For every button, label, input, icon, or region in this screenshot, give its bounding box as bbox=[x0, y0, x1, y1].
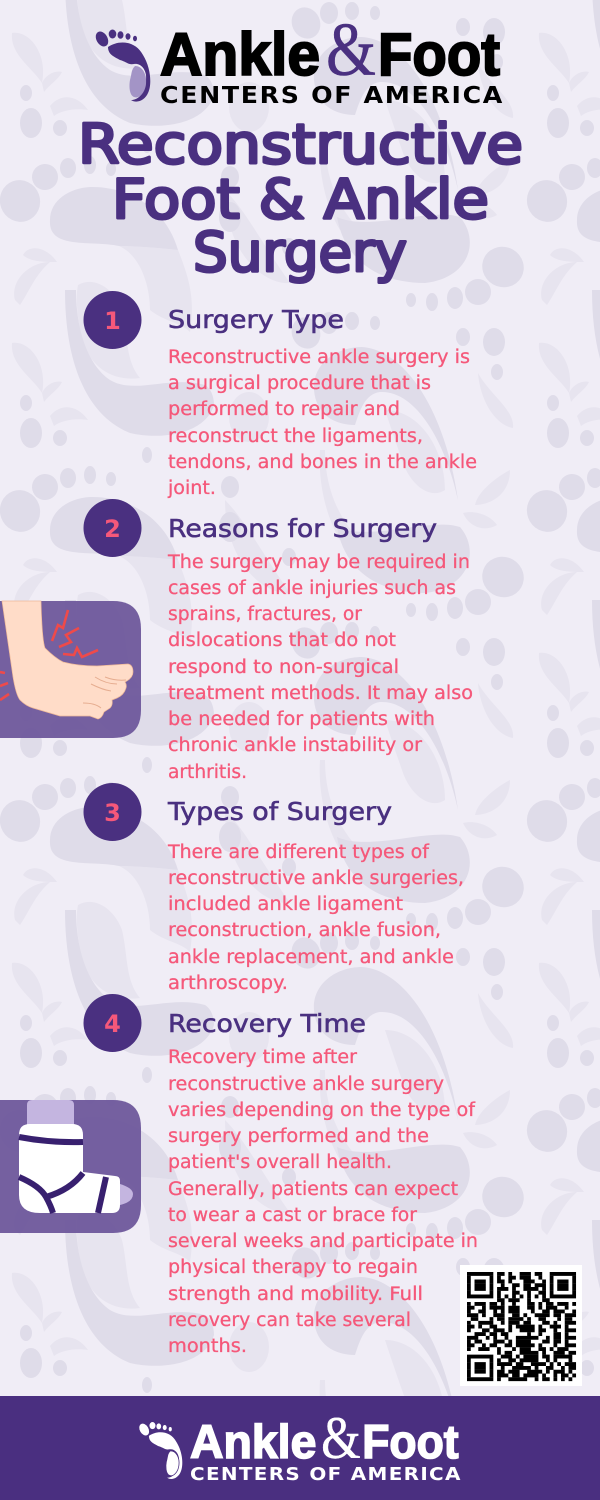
title: Reconstructive bbox=[78, 113, 523, 176]
number badge 1: 1 bbox=[104, 307, 121, 335]
icon: foot in cast bbox=[19, 1100, 133, 1213]
footer wordmark bbox=[190, 1405, 462, 1485]
text: types of surgery bbox=[167, 842, 464, 994]
panel: reasons for surgery bbox=[84, 499, 473, 783]
title: Foot & Ankle bbox=[112, 168, 489, 231]
heading: reasons for surgery: Reasons for Surgery bbox=[168, 514, 437, 543]
icon: white footprint bbox=[137, 1422, 182, 1479]
panel: types of surgery bbox=[84, 783, 464, 994]
text: recovery time: recovery can take several bbox=[168, 1310, 411, 1331]
text: recovery time: strength and mobility. Full bbox=[168, 1284, 423, 1305]
illustration: foot cast card bbox=[0, 1100, 141, 1233]
logo wordmark: & bbox=[326, 8, 376, 92]
icon: purple footprint bbox=[93, 29, 150, 102]
toe lines bbox=[83, 677, 126, 708]
text: reasons for surgery: cases of ankle injuries such as bbox=[168, 578, 456, 599]
text: reasons for surgery: respond to non-surgical bbox=[168, 657, 399, 678]
panel: surgery type bbox=[84, 291, 477, 499]
text: types of surgery: reconstruction, ankle fusion, bbox=[168, 920, 441, 941]
text: reasons for surgery: chronic ankle instability or bbox=[168, 735, 422, 756]
text: surgery type: reconstruct the ligaments, bbox=[168, 426, 423, 447]
text: reasons for surgery: sprains, fractures, or bbox=[168, 604, 362, 625]
text: recovery time: reconstructive ankle surgery bbox=[168, 1074, 444, 1095]
logo wordmark bbox=[160, 8, 504, 109]
text: reasons for surgery: treatment methods. It may also bbox=[168, 683, 473, 704]
text: types of surgery: arthroscopy. bbox=[168, 973, 288, 994]
text: surgery type: tendons, and bones in the ankle bbox=[168, 452, 477, 473]
footer wordmark: Foot bbox=[362, 1416, 459, 1469]
title: Surgery bbox=[193, 221, 407, 284]
text: reasons for surgery: The surgery may be required in bbox=[167, 552, 470, 573]
number badge 4 bbox=[84, 994, 142, 1052]
footer logo bbox=[137, 1405, 462, 1485]
number badge 3 bbox=[84, 783, 142, 841]
text: surgery type bbox=[167, 347, 477, 499]
number badge 4: 4 bbox=[104, 1010, 121, 1038]
text: types of surgery: ankle replacement, and ankle bbox=[168, 947, 454, 968]
logo wordmark: CENTERS OF AMERICA bbox=[160, 83, 504, 109]
text: surgery type: joint. bbox=[167, 478, 216, 499]
logo wordmark: Ankle bbox=[160, 21, 320, 88]
footer wordmark: CENTERS OF AMERICA bbox=[190, 1464, 462, 1485]
title bbox=[78, 113, 523, 284]
number badge 2 bbox=[84, 499, 142, 557]
heading: recovery time: Recovery Time bbox=[168, 1009, 366, 1038]
QR code bbox=[460, 1265, 582, 1386]
number badge 3: 3 bbox=[104, 799, 121, 827]
text: recovery time: varies depending on the type of bbox=[168, 1100, 476, 1121]
text: recovery time: months. bbox=[168, 1336, 247, 1357]
text: reasons for surgery: dislocations that do not bbox=[168, 630, 396, 651]
text: types of surgery: There are different types of bbox=[167, 842, 430, 863]
number badge 1 bbox=[84, 291, 142, 349]
footer wordmark: Ankle bbox=[190, 1416, 316, 1469]
text: recovery time: patient's overall health. bbox=[168, 1152, 392, 1173]
text: recovery time: several weeks and participate in bbox=[168, 1231, 478, 1252]
panel: recovery time bbox=[84, 994, 478, 1357]
text: recovery time: Recovery time after bbox=[168, 1047, 357, 1068]
text: surgery type: Reconstructive ankle surgery is bbox=[168, 347, 470, 368]
text: recovery time: to wear a cast or brace for bbox=[168, 1205, 417, 1226]
heading: surgery type: Surgery Type bbox=[168, 305, 344, 334]
text: recovery time: surgery performed and the bbox=[168, 1126, 429, 1147]
text: reasons for surgery: be needed for patients with bbox=[168, 709, 435, 730]
text: reasons for surgery: arthritis. bbox=[168, 762, 247, 783]
text: surgery type: performed to repair and bbox=[168, 399, 400, 420]
number badge 2: 2 bbox=[104, 515, 121, 543]
footer band bbox=[0, 1396, 600, 1500]
icon: pain bolts bbox=[0, 610, 98, 700]
text: types of surgery: reconstructive ankle surgeries, bbox=[168, 868, 464, 889]
logo wordmark: Foot bbox=[378, 21, 500, 88]
heading: types of surgery: Types of Surgery bbox=[167, 797, 392, 826]
text: recovery time: physical therapy to regain bbox=[168, 1257, 418, 1278]
illustration: injured foot card bbox=[0, 601, 141, 738]
text: reasons for surgery bbox=[167, 552, 473, 783]
text: types of surgery: included ankle ligament bbox=[168, 894, 403, 915]
logo: Ankle & Foot Centers of America bbox=[93, 8, 504, 109]
text: recovery time: Generally, patients can expect bbox=[168, 1179, 458, 1200]
footer wordmark: & bbox=[321, 1405, 361, 1471]
icon: injured foot bbox=[2, 601, 133, 719]
text: recovery time bbox=[168, 1047, 478, 1357]
text: surgery type: a surgical procedure that is bbox=[168, 373, 431, 394]
